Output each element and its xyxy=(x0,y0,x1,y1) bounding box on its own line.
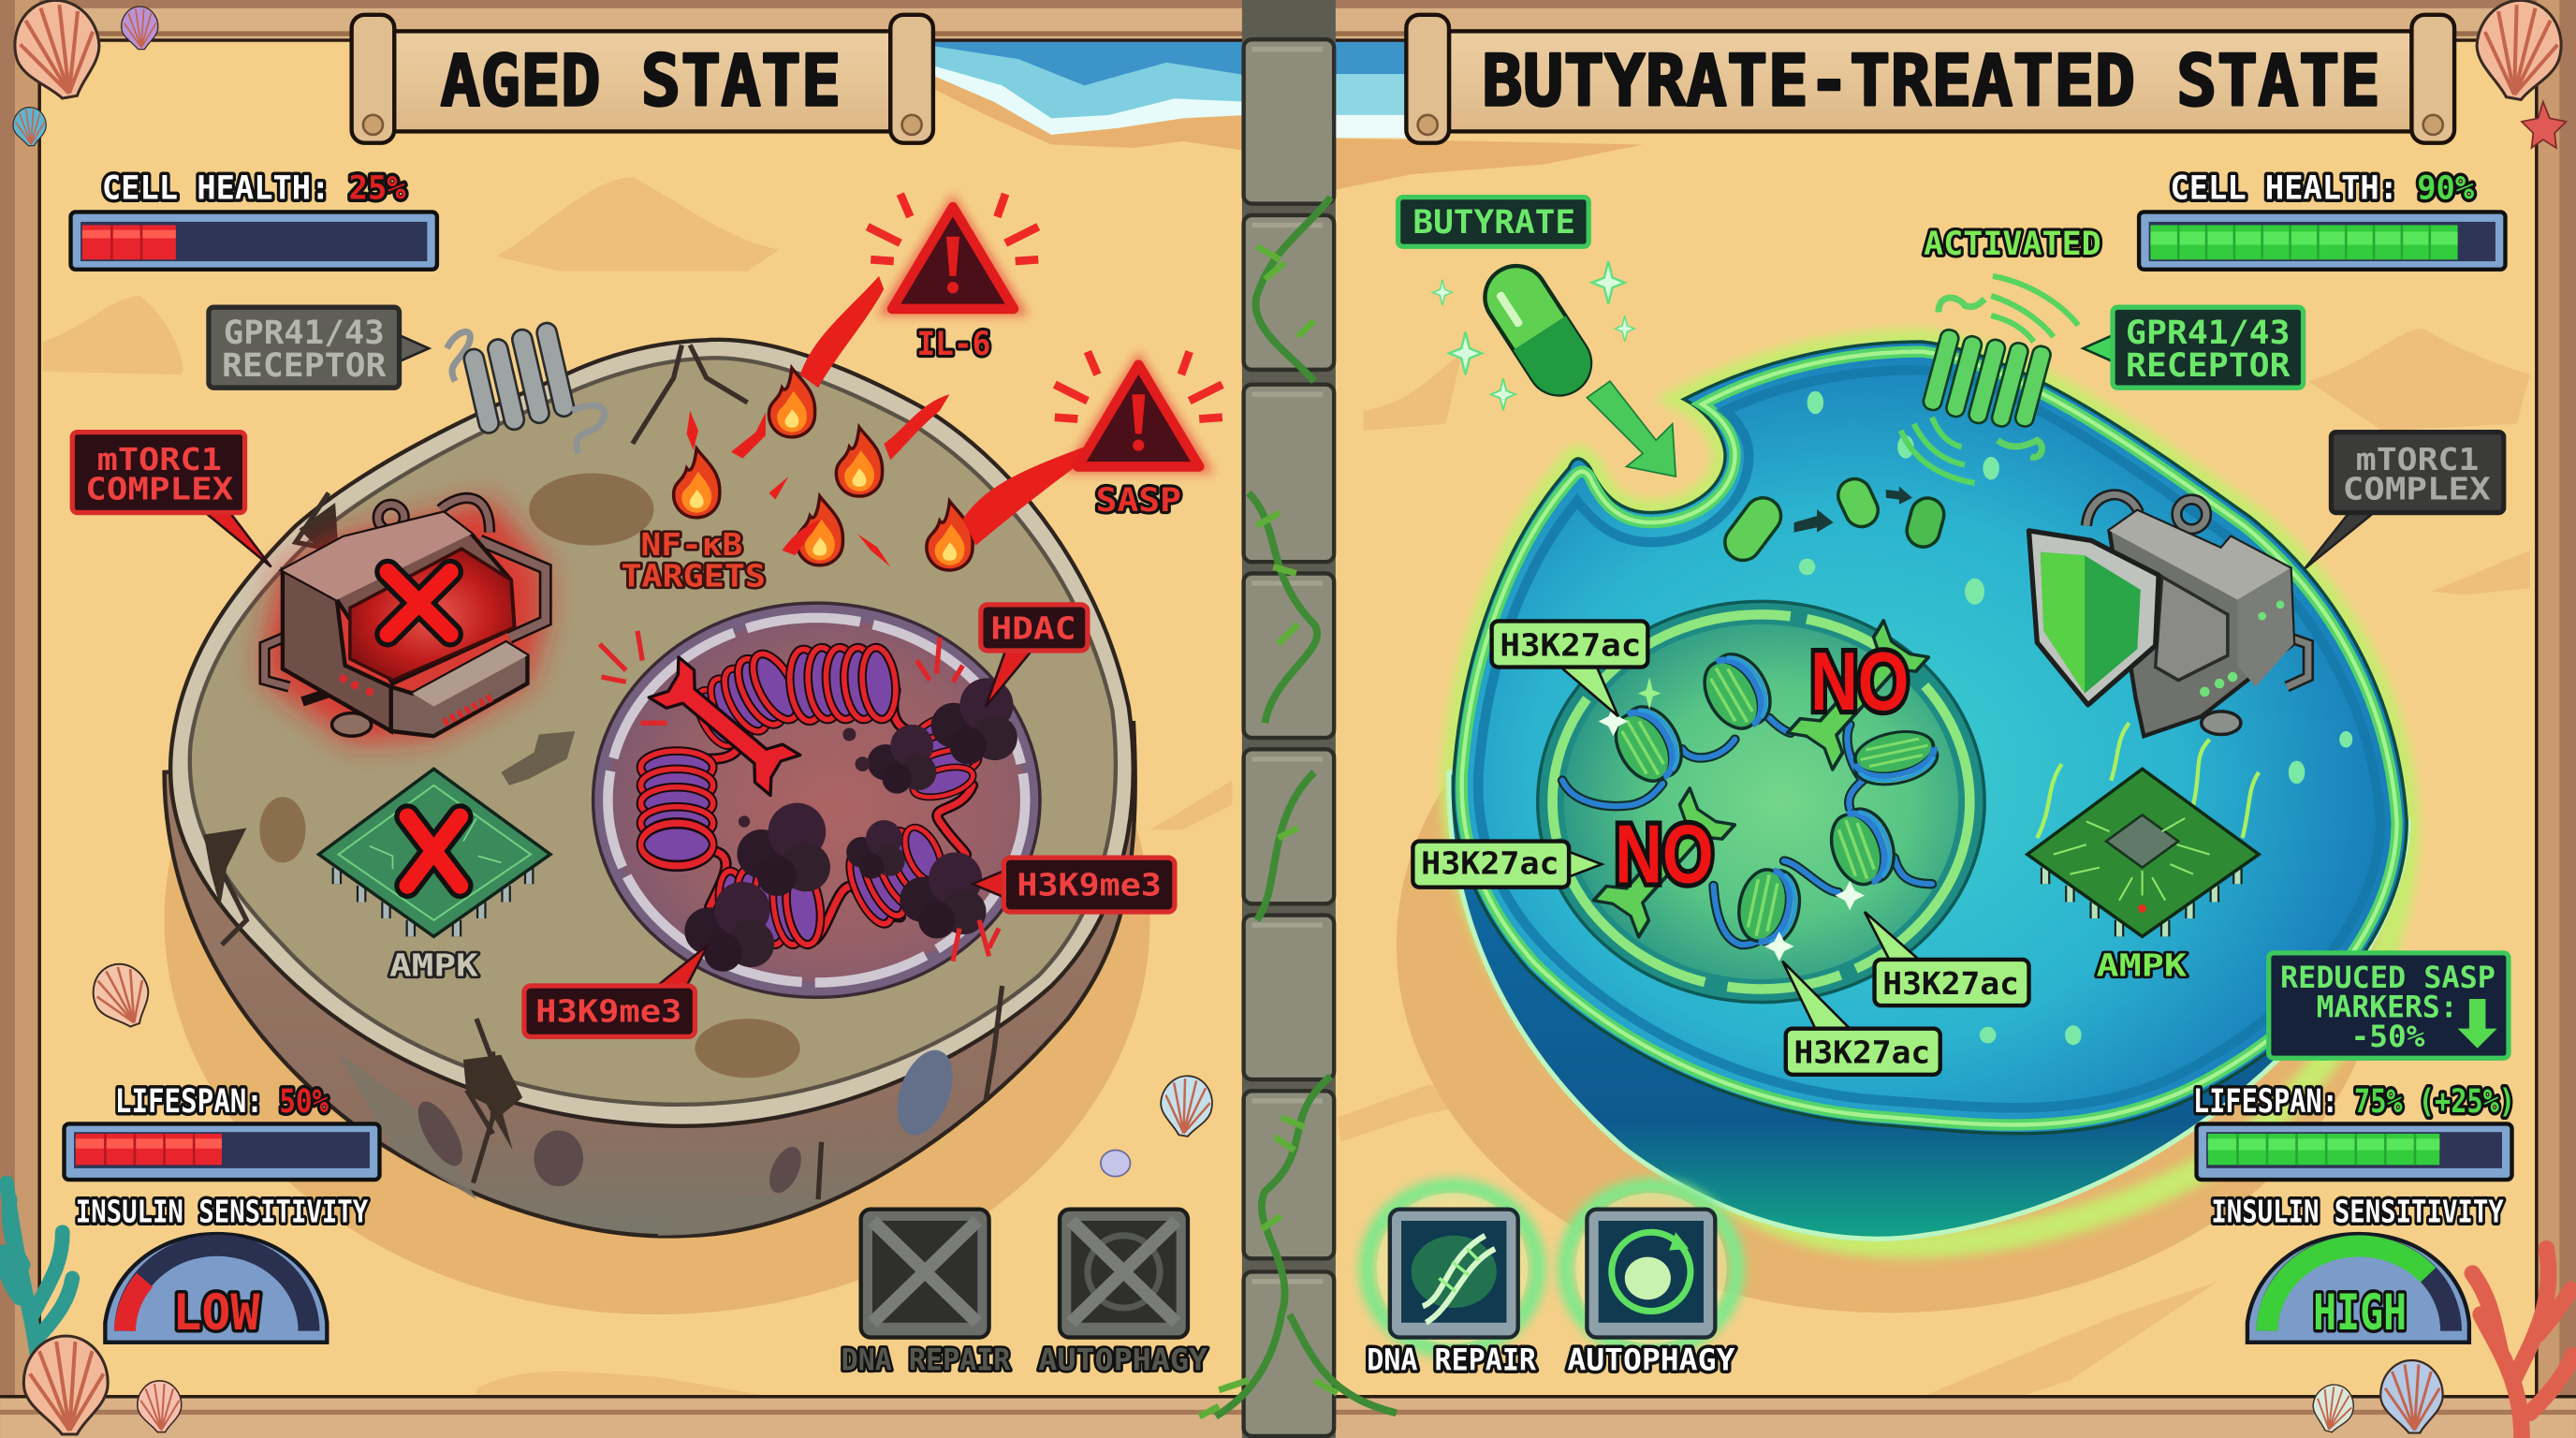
label: gpr41/43 receptor right: GPR41/43 xyxy=(2126,314,2291,352)
starfish xyxy=(2522,102,2566,148)
butyrate cell shadow xyxy=(1397,577,2382,1313)
aged cell shadow xyxy=(165,526,1150,1314)
butyrate cell xyxy=(1397,342,2408,1313)
sparkles xyxy=(1432,261,1634,410)
butyrate cell top surface membrane xyxy=(1454,342,2407,1134)
pebble: lilac xyxy=(1101,1151,1131,1177)
green shield xyxy=(2029,531,2159,705)
gpr41/43 receptor, green, activated xyxy=(1901,276,2078,483)
callout: reduced SASP markers xyxy=(2269,953,2509,1058)
label: H3K9me3 bottom xyxy=(524,945,708,1036)
butyrate nucleus xyxy=(1538,601,1984,1003)
gauge: insulin sensitivity high xyxy=(2211,1194,2504,1343)
title banner: butyrate-treated state xyxy=(1406,15,2454,143)
title: butyrate-treated state: BUTYRATE-TREATED STATE xyxy=(1482,39,2380,122)
label: H3K27ac top left xyxy=(1492,621,1647,716)
mTORC1 machine, inhibited xyxy=(265,498,546,742)
label: mTORC1 complex left: mTORC1 xyxy=(97,441,222,477)
label: IL-6: IL-6 xyxy=(916,325,990,363)
stat: cell health 90 percent xyxy=(2139,169,2505,270)
coral: red xyxy=(2472,1249,2572,1438)
label: activated: ACTIVATED xyxy=(1924,225,2101,263)
icon: autophagy, active: AUTOPHAGY xyxy=(1567,1344,1734,1378)
label: NO top: NO xyxy=(1810,636,1909,727)
red wrench xyxy=(647,654,802,798)
aged cell cytoplasm xyxy=(190,358,1116,1105)
label: gpr41/43 receptor left: RECEPTOR xyxy=(222,346,387,385)
label: butyrate: BUTYRATE xyxy=(1412,203,1575,242)
stat: lifespan 75 percent plus 25 xyxy=(2193,1082,2515,1180)
open chromatin strands xyxy=(1562,718,1932,945)
arrow: down xyxy=(2458,999,2497,1049)
gpr41/43 receptor, grey xyxy=(446,321,605,453)
warning: IL-6 xyxy=(868,194,1038,363)
label: H3K27ac lower right: H3K27ac xyxy=(1882,965,2019,1002)
label: mTORC1 complex right: COMPLEX xyxy=(2343,471,2491,507)
gauge: insulin sensitivity low xyxy=(76,1194,368,1343)
label: NF-kB targets xyxy=(621,526,766,594)
ocean water strip xyxy=(933,39,1643,191)
label: NF-kB targets: TARGETS xyxy=(621,558,766,594)
icon: DNA repair, disabled xyxy=(842,1210,1011,1378)
gauge: insulin sensitivity high: HIGH xyxy=(2313,1284,2407,1342)
seashell: bottom right white xyxy=(2307,1380,2358,1436)
butyrate capsules in cytoplasm xyxy=(1718,474,1948,567)
callout: reduced SASP markers: REDUCED SASP xyxy=(2280,961,2496,995)
label: H3K27ac lower right xyxy=(1865,912,2029,1005)
label: mTORC1 complex left xyxy=(72,433,271,566)
green wrench left xyxy=(1591,786,1737,939)
icon: DNA repair, active: DNA REPAIR xyxy=(1367,1344,1537,1378)
label: H3K9me3 bottom: H3K9me3 xyxy=(535,993,681,1030)
label: HDAC: HDAC xyxy=(990,610,1076,647)
title banner: aged state xyxy=(352,15,933,143)
green fill xyxy=(2150,225,2458,259)
label: AMPK right: AMPK xyxy=(2096,946,2187,983)
stat: cell health 25 percent xyxy=(71,169,437,270)
stone wall divider xyxy=(1199,0,1397,1438)
seashell: purple xyxy=(122,7,158,50)
seashell: top left xyxy=(7,0,108,105)
icon: DNA repair, disabled: DNA REPAIR xyxy=(842,1344,1011,1378)
green fill xyxy=(2208,1134,2439,1165)
coral: teal xyxy=(4,1183,72,1372)
label: gpr41/43 receptor right: RECEPTOR xyxy=(2126,346,2291,385)
red x xyxy=(407,816,460,886)
aged chromatin strands xyxy=(710,690,973,940)
label: butyrate xyxy=(1398,198,1588,246)
aged cell xyxy=(165,276,1150,1314)
cytoplasm speckles xyxy=(1799,391,2352,1045)
label: mTORC1 complex left: COMPLEX xyxy=(85,471,233,507)
flames: NF-kB targets xyxy=(674,368,973,570)
gauge: insulin sensitivity low: INSULIN SENSITIVITY xyxy=(76,1194,368,1230)
label: mTORC1 complex right xyxy=(2305,433,2504,568)
seashell: bottom right blue xyxy=(2380,1360,2443,1433)
aged nucleus xyxy=(593,603,1040,997)
warning: SASP xyxy=(1055,352,1222,520)
label: AMPK left: AMPK xyxy=(389,946,478,983)
label: gpr41/43 receptor left xyxy=(209,307,429,388)
callout: reduced SASP markers: MARKERS: xyxy=(2317,990,2458,1024)
icon: autophagy, disabled xyxy=(1038,1210,1208,1378)
icon: butyrate capsule xyxy=(1432,254,1634,410)
title: aged state: AGED STATE xyxy=(440,39,842,122)
stat: lifespan 50 percent: LIFESPAN: 50% xyxy=(115,1082,329,1121)
AMPK chip, active xyxy=(2027,723,2259,936)
aged cell side wall xyxy=(165,723,1135,1236)
gauge: insulin sensitivity low: LOW xyxy=(172,1284,260,1342)
label: NF-kB targets: NF-κB xyxy=(641,526,742,563)
callout: reduced SASP markers: -50% xyxy=(2351,1020,2424,1054)
icon: DNA repair, active xyxy=(1367,1186,1538,1378)
label: SASP: SASP xyxy=(1096,481,1181,520)
green wrench top xyxy=(1785,619,1931,771)
arrow: butyrate into cell xyxy=(1587,381,1676,477)
red fill xyxy=(76,1134,222,1165)
lower box xyxy=(391,642,527,736)
label: H3K9me3 right xyxy=(973,858,1175,912)
stat: cell health 25 percent: CELL HEALTH: 25% xyxy=(102,169,406,207)
red core window xyxy=(350,549,514,681)
butyrate cell side wall xyxy=(1449,772,2408,1239)
signal waves xyxy=(1901,276,2078,483)
label: gpr41/43 receptor right xyxy=(2083,307,2304,388)
red x xyxy=(388,572,450,634)
AMPK chip, inhibited xyxy=(319,769,550,936)
sparkles on histone tails xyxy=(1599,677,1865,961)
label: H3K9me3 right: H3K9me3 xyxy=(1017,866,1162,902)
label: mTORC1 complex right: mTORC1 xyxy=(2356,441,2479,477)
label: gpr41/43 receptor left: GPR41/43 xyxy=(224,314,385,352)
red fill xyxy=(82,225,176,259)
seashell: bottom left xyxy=(23,1336,108,1434)
green outer glow xyxy=(1454,342,2407,1245)
red stress sparks xyxy=(600,631,999,961)
mTORC1 machine, shielded xyxy=(2029,494,2308,736)
label: HDAC xyxy=(981,605,1088,707)
stat: cell health 90 percent: CELL HEALTH: 90% xyxy=(2170,169,2474,207)
seashell: top right xyxy=(2468,0,2569,105)
open chromatin coils xyxy=(1604,644,1941,950)
icon: autophagy, disabled: AUTOPHAGY xyxy=(1038,1344,1208,1378)
seashell: sand left xyxy=(85,956,158,1035)
seashell: blue xyxy=(13,108,46,146)
label: H3K27ac lower xyxy=(1782,961,1940,1075)
label: H3K27ac top left: H3K27ac xyxy=(1500,626,1641,663)
seashell: bottom left small xyxy=(138,1381,182,1432)
label: NO left: NO xyxy=(1615,808,1714,900)
aged cell top surface xyxy=(170,340,1134,1126)
label: H3K27ac left: H3K27ac xyxy=(1421,845,1559,882)
gauge: insulin sensitivity high: INSULIN SENSITIVITY xyxy=(2211,1194,2504,1230)
stat: lifespan 50 percent xyxy=(65,1082,379,1180)
label: H3K27ac left xyxy=(1412,842,1602,888)
heterochromatin clumps xyxy=(684,678,1017,972)
aged chromatin coils xyxy=(641,646,987,946)
cracks and stains xyxy=(204,345,1003,1236)
red signal streaks xyxy=(687,276,1084,566)
seashell: sand blue xyxy=(1156,1072,1217,1139)
label: H3K27ac lower: H3K27ac xyxy=(1794,1034,1930,1071)
icon: autophagy, active xyxy=(1566,1186,1736,1378)
stat: lifespan 75 percent plus 25: LIFESPAN: 75% (+25%) xyxy=(2193,1082,2515,1121)
